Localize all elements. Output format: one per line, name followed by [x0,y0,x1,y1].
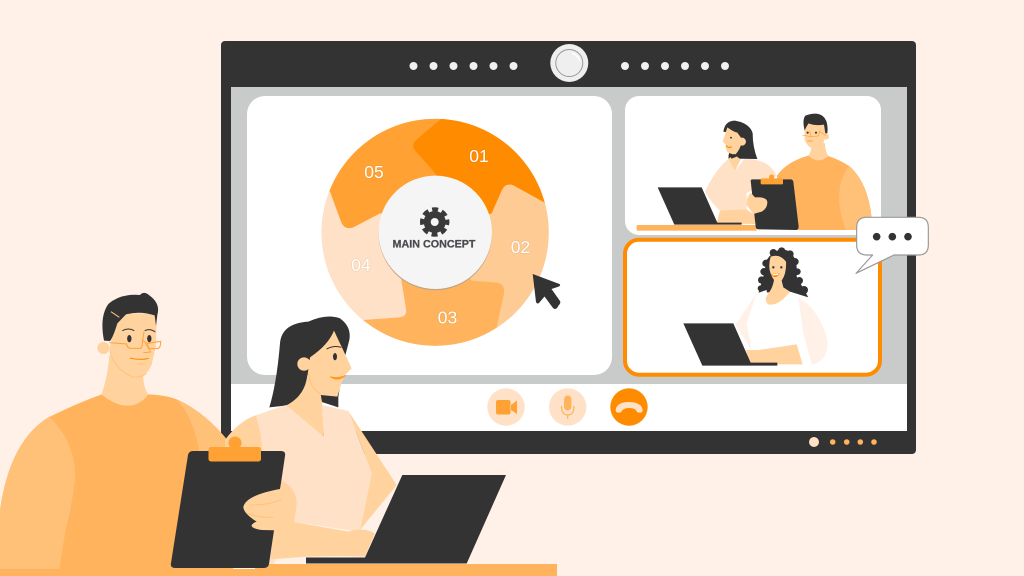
desk [0,564,557,576]
right sleeve [177,399,230,453]
small clipboard [751,174,799,230]
glasses [109,332,161,349]
ear [297,357,311,371]
woman with laptop [225,316,397,565]
cycle diagram [322,118,549,346]
segment numbers: 02 [511,237,530,257]
top speaker dots and webcam [410,44,729,82]
forearm [271,522,375,559]
speech bubble [856,217,928,273]
panel: main concept slide [247,96,612,375]
segment numbers: 01 [469,146,489,166]
ear [97,342,109,354]
hair [269,316,350,407]
call controls [487,388,648,426]
segment numbers: 04 [351,255,371,275]
left sleeve [0,417,75,570]
label: main concept: MAIN CONCEPT [392,238,476,250]
laptop [306,475,506,564]
icon: gear [422,209,447,235]
curly hair [758,247,808,297]
eye and mouth [333,353,337,360]
segment numbers: 03 [438,308,457,328]
mouth [130,358,149,359]
sleeves [798,297,828,365]
monitor frame [221,41,916,454]
face and neck [766,256,790,305]
icon: microphone button [549,388,586,426]
blouse [747,290,808,350]
laptop [683,323,777,366]
icon: video camera button [487,388,525,426]
segment numbers [351,146,530,328]
left sleeve shade [225,416,262,453]
forearm [746,344,803,364]
hair [102,293,158,341]
neck [102,355,148,405]
panel: top right video tile [625,96,881,235]
panel: bottom right video tile (active speaker) [625,240,880,375]
segment numbers: 05 [364,162,384,182]
clip [208,447,261,462]
icon: cursor arrow [533,274,560,309]
icon: hang up button [610,388,648,426]
bottom status dots [809,437,877,447]
small desk [637,225,757,231]
center circle [379,176,492,290]
small woman [705,121,777,224]
neck [285,375,324,437]
hand holding clipboard [243,481,297,531]
small laptop [658,187,742,225]
face [307,331,352,397]
shirt [0,394,233,572]
man with glasses [0,293,233,572]
clipboard [171,436,285,568]
back sleeve [348,411,397,530]
eyes [127,335,131,342]
segments of the cycle [322,118,549,346]
blouse [225,405,372,565]
face [109,313,157,377]
small hand [747,193,767,214]
small man [777,114,872,230]
